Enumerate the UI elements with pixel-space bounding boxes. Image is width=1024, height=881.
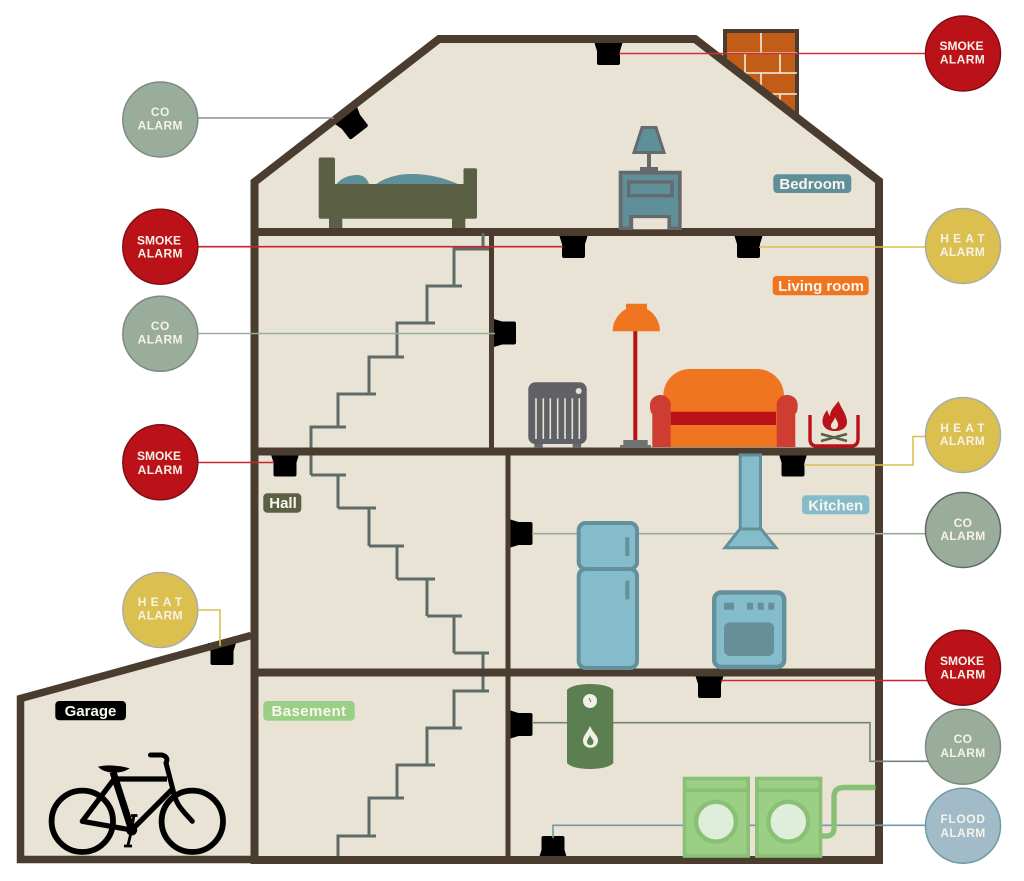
badge: CO alarm, stairs: CO bbox=[151, 319, 170, 333]
badge: heat alarm, kitchen: ALARM bbox=[940, 434, 985, 448]
line: heat kitchen bbox=[804, 436, 930, 465]
chimney bbox=[725, 31, 797, 120]
line: flood bbox=[553, 825, 930, 838]
sensor: garage bbox=[208, 643, 236, 665]
line: smoke upper left bbox=[195, 246, 563, 248]
badge: heat alarm, living room: ALARM bbox=[940, 245, 985, 259]
room label: Garage: Garage bbox=[65, 703, 116, 720]
room label: Kitchen: Kitchen bbox=[808, 498, 863, 514]
line: heat living room bbox=[759, 246, 930, 248]
room label: Living room: Living room bbox=[778, 278, 864, 295]
logs bbox=[821, 434, 847, 441]
sensor: kitchen wall bbox=[510, 520, 532, 548]
room label: Bedroom: Bedroom bbox=[779, 176, 845, 193]
sensor: living room ceiling right bbox=[734, 236, 762, 258]
badge: CO alarm, stairs bbox=[123, 296, 198, 371]
boiler bbox=[567, 684, 613, 769]
line: heat garage bbox=[195, 610, 220, 646]
staircase bbox=[311, 233, 489, 859]
drawer bbox=[629, 182, 672, 196]
bed bbox=[319, 158, 477, 228]
nightstand with lamp bbox=[619, 128, 682, 230]
fridge bbox=[579, 523, 637, 668]
line: CO kitchen bbox=[532, 533, 930, 535]
line: CO basement bbox=[532, 723, 930, 761]
badge: heat alarm, kitchen bbox=[926, 398, 1000, 472]
room label: Hall: Hall bbox=[269, 495, 297, 512]
flame icon bbox=[583, 726, 598, 748]
sensor: basement floor flood bbox=[539, 836, 567, 858]
badge: CO alarm, kitchen: ALARM bbox=[940, 529, 986, 543]
badge: smoke alarm, basement bbox=[926, 630, 1000, 705]
badge: smoke alarm, upper left bbox=[123, 209, 198, 284]
gauge bbox=[583, 694, 597, 708]
house interior bbox=[254, 39, 879, 860]
badge: CO alarm, stairs: ALARM bbox=[138, 332, 183, 346]
washer 1 bbox=[684, 778, 749, 856]
sensor: bedroom roof slope bbox=[335, 107, 371, 141]
cabinet bbox=[619, 171, 682, 230]
badge: heat alarm, kitchen: HEAT bbox=[940, 421, 989, 435]
badge: smoke alarm, basement: ALARM bbox=[940, 668, 986, 682]
badge: smoke alarm, hall bbox=[123, 425, 198, 500]
connector lines bbox=[195, 54, 930, 838]
flame bbox=[822, 401, 847, 431]
stair newel over floor bbox=[482, 233, 484, 240]
badge: heat alarm, garage: HEAT bbox=[138, 595, 186, 609]
line: smoke top bbox=[619, 52, 930, 54]
badge: smoke alarm, basement: SMOKE bbox=[940, 654, 984, 668]
house walls and floors bbox=[20, 39, 879, 860]
bicycle bbox=[52, 755, 223, 852]
lamp bbox=[634, 128, 664, 152]
badge: smoke alarm, hall: SMOKE bbox=[137, 449, 181, 463]
room label: Basement: Basement bbox=[272, 703, 346, 720]
fireplace bbox=[810, 401, 858, 446]
alarm sensors bbox=[208, 43, 807, 858]
badge: flood alarm bbox=[926, 788, 1000, 863]
line: CO stair wall bbox=[195, 332, 495, 334]
badge: CO alarm, roof: ALARM bbox=[138, 118, 183, 132]
badge: smoke alarm, upper left: SMOKE bbox=[137, 233, 181, 247]
stove bbox=[714, 592, 784, 667]
hose bbox=[822, 788, 876, 836]
badge: smoke alarm, bedroom: ALARM bbox=[940, 53, 985, 67]
sensor: basement wall bbox=[510, 710, 532, 738]
bed frame bbox=[319, 158, 477, 228]
badge: CO alarm, basement bbox=[926, 709, 1000, 784]
badge: CO alarm, kitchen: CO bbox=[954, 516, 972, 530]
badge: heat alarm, living room: HEAT bbox=[940, 232, 989, 246]
badge: CO alarm, roof bbox=[123, 82, 198, 157]
sofa bbox=[650, 369, 798, 447]
sensor: bedroom ceiling bbox=[594, 43, 622, 65]
badge: CO alarm, kitchen bbox=[926, 492, 1000, 568]
cooker hood bbox=[725, 455, 776, 548]
line: CO roof bbox=[195, 117, 334, 119]
floor lamp bbox=[613, 304, 660, 448]
sensor: basement ceiling bbox=[696, 676, 724, 698]
garage interior bbox=[20, 634, 254, 860]
badge: CO alarm, basement: ALARM bbox=[940, 746, 986, 760]
badge: CO alarm, roof: CO bbox=[151, 105, 170, 119]
washing machines bbox=[684, 778, 876, 856]
sensor: hall ceiling bbox=[271, 454, 299, 476]
badge: smoke alarm, hall: ALARM bbox=[138, 463, 183, 477]
badge: heat alarm, garage bbox=[123, 572, 198, 648]
sensor: living room ceiling left bbox=[560, 236, 588, 258]
badge: smoke alarm, bedroom: SMOKE bbox=[939, 39, 984, 53]
badge: heat alarm, living room bbox=[926, 208, 1000, 284]
badge: smoke alarm, bedroom bbox=[926, 16, 1000, 91]
sensor: stair wall bbox=[494, 319, 516, 347]
badge: smoke alarm, upper left: ALARM bbox=[138, 247, 183, 261]
badge: flood alarm: FLOOD bbox=[940, 812, 986, 826]
washer 2 bbox=[756, 778, 821, 856]
blanket bbox=[336, 174, 460, 185]
badge: flood alarm: ALARM bbox=[940, 826, 986, 840]
room label: Hall bbox=[263, 493, 301, 513]
badge: heat alarm, garage: ALARM bbox=[138, 608, 183, 622]
radiator bbox=[528, 382, 587, 448]
badge: CO alarm, basement: CO bbox=[954, 732, 972, 746]
line: smoke hall bbox=[195, 462, 274, 464]
room label: Garage bbox=[55, 701, 126, 720]
sensor: kitchen ceiling bbox=[779, 454, 807, 476]
line: smoke basement bbox=[721, 680, 930, 682]
